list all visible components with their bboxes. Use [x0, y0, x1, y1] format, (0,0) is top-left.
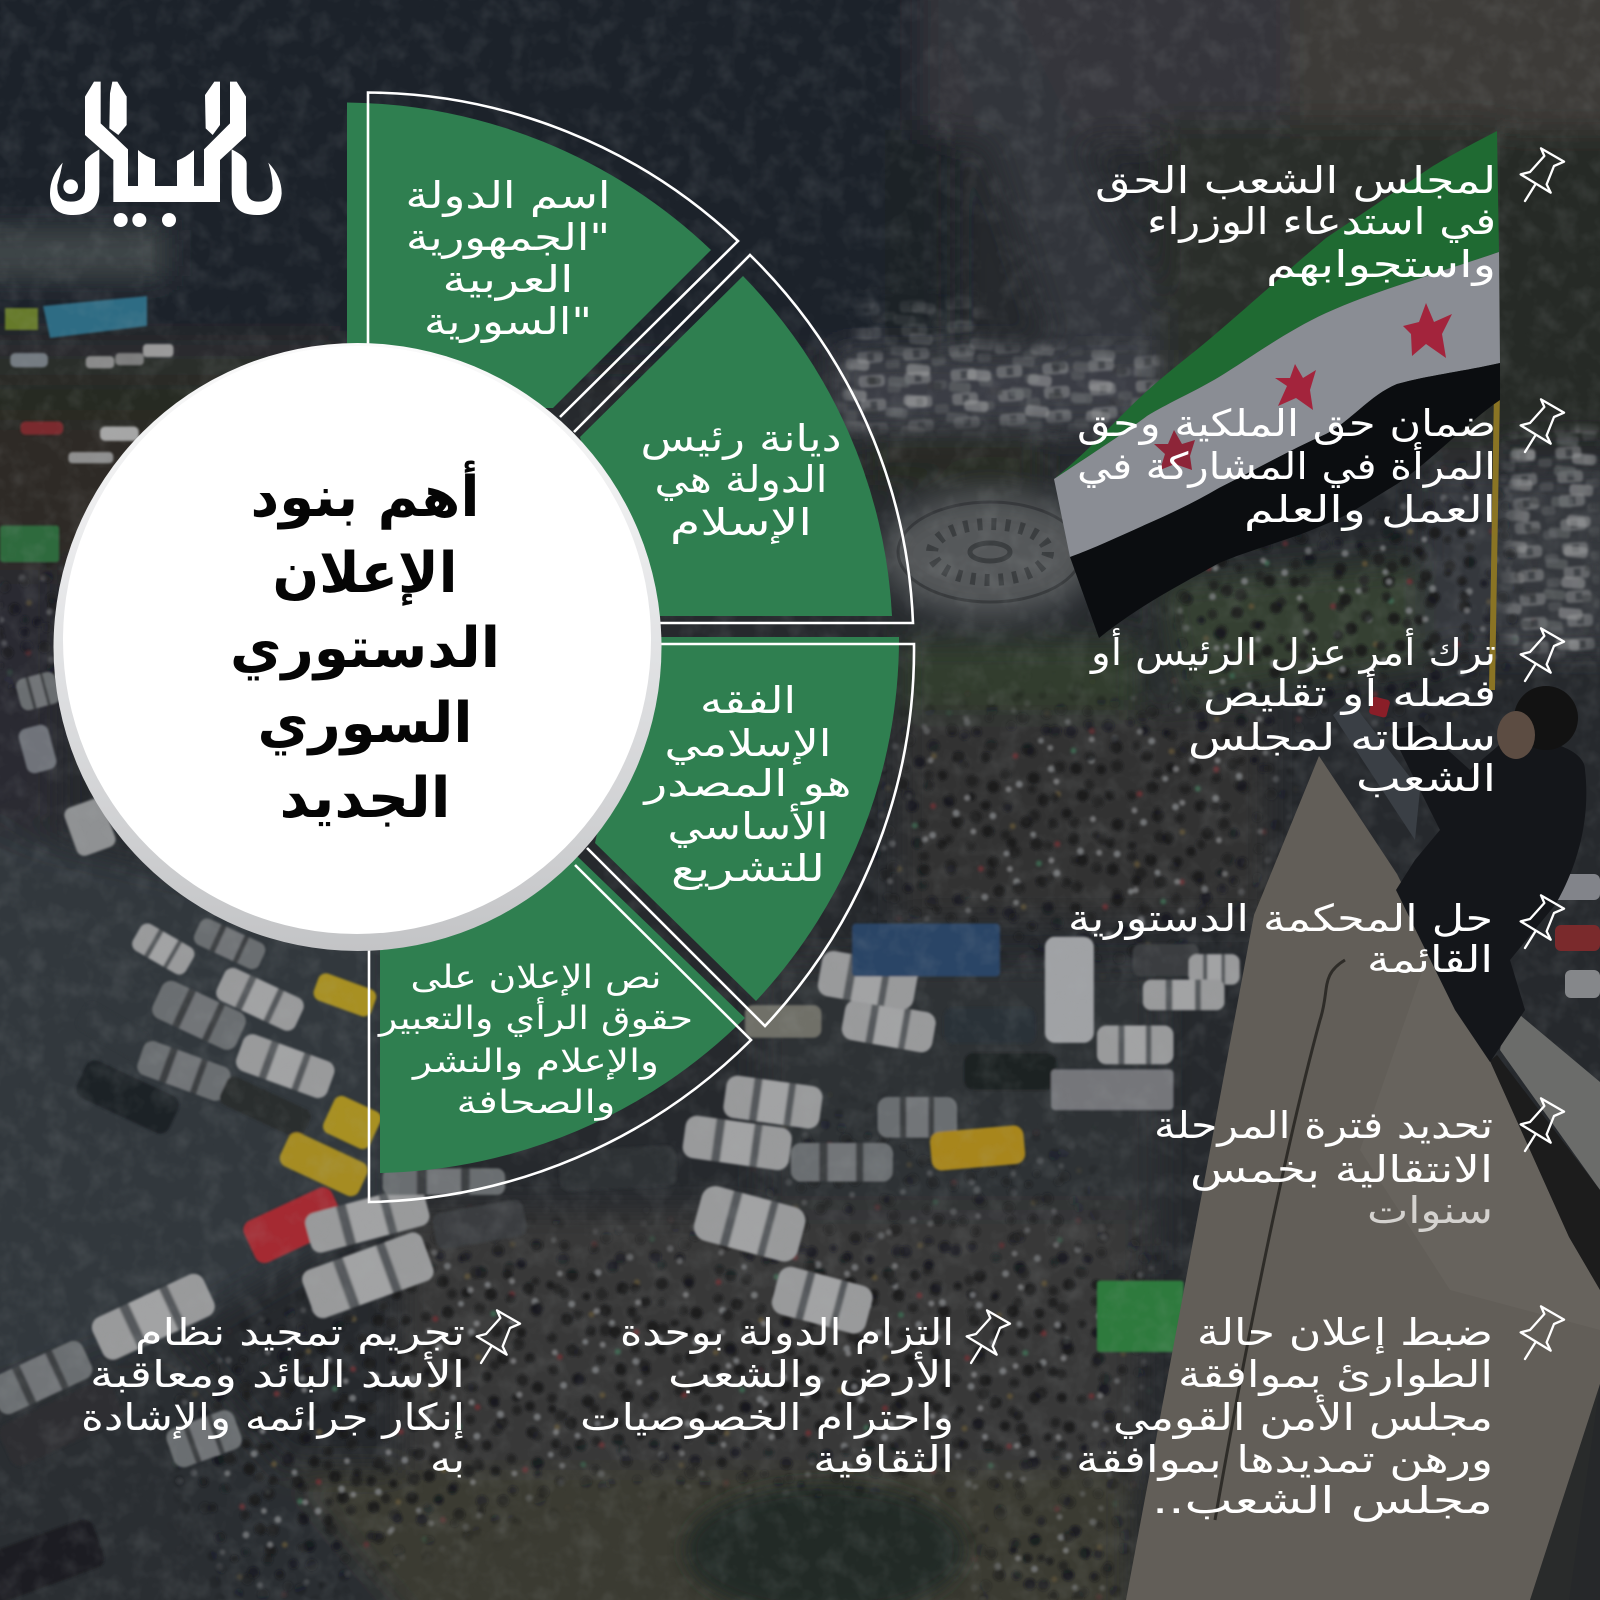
item 1: summoning ministers: واستجوابهم — [1266, 243, 1496, 286]
title: الدستوري — [230, 616, 500, 681]
item 6: state of emergency: ورهن تمديدها بموافقة — [1076, 1438, 1493, 1481]
title — [230, 460, 500, 831]
item 7: unity of the land: التزام الدولة بوحدة — [620, 1311, 954, 1354]
item 6: state of emergency: ضبط إعلان حالة — [1197, 1311, 1493, 1354]
item 5: transition period: سنوات — [1367, 1189, 1493, 1232]
item 3: removing the president: فصله أو تقليص — [1203, 669, 1496, 715]
item 7: unity of the land: واحترام الخصوصيات — [580, 1396, 954, 1439]
segment 2: religion of head of state: ديانة رئيس — [640, 417, 842, 460]
item 4: constitutional court: القائمة — [1367, 938, 1493, 981]
item 2: property and women's rights: العمل والعلم — [1244, 488, 1496, 531]
icon: pin 8 — [477, 1310, 520, 1363]
item 7: unity of the land — [580, 1311, 954, 1481]
item 6: state of emergency: مجلس الشعب.. — [1152, 1479, 1493, 1522]
concrete tower and man — [1126, 686, 1600, 1600]
item 5: transition period — [1154, 1104, 1493, 1232]
segment 2: religion of head of state: الإسلام — [670, 501, 812, 544]
item 8: glorifying the Assad regime: إنكار جرائمه والإشادة — [81, 1396, 465, 1439]
billboard — [43, 296, 147, 338]
item 3: removing the president: ترك أمر عزل الرئيس أو — [1089, 628, 1496, 674]
icon: pin 5 — [1521, 1098, 1564, 1151]
item 8: glorifying the Assad regime: به — [430, 1438, 465, 1481]
item 3: removing the president: الشعب — [1356, 757, 1496, 800]
segment 4: freedom of opinion — [369, 856, 751, 1202]
item 8: glorifying the Assad regime: الأسد البائد ومعاقبة — [90, 1351, 465, 1396]
title: الإعلان — [272, 541, 458, 606]
plaza rings — [898, 502, 1082, 602]
segment 2: religion of head of state: الدولة هي — [654, 458, 828, 501]
segment 4: freedom of opinion: نص الإعلان على — [410, 958, 662, 996]
segment 1: state name: العربية — [442, 258, 574, 301]
segment 3: Islamic jurisprudence: للتشريع — [671, 847, 825, 890]
segment 3: Islamic jurisprudence: هو المصدر — [642, 762, 852, 805]
item 1: summoning ministers: لمجلس الشعب الحق — [1095, 159, 1496, 202]
title: الجديد — [280, 766, 450, 831]
parked cars — [0, 344, 1240, 1600]
item 4: constitutional court — [1068, 897, 1493, 981]
segment 4: freedom of opinion: والصحافة — [456, 1083, 616, 1121]
item 6: state of emergency — [1076, 1311, 1493, 1522]
icon: pin 1 — [1521, 148, 1564, 201]
item 8: glorifying the Assad regime — [81, 1311, 465, 1481]
item 5: transition period: الانتقالية بخمس — [1190, 1148, 1493, 1191]
icon: pin 3 — [1521, 628, 1564, 681]
item 4: constitutional court: حل المحكمة الدستورية — [1068, 897, 1493, 940]
item 2: property and women's rights — [1077, 402, 1496, 531]
segment 3: Islamic jurisprudence: الأساسي — [668, 803, 828, 848]
item 6: state of emergency: مجلس الأمن القومي — [1113, 1394, 1493, 1439]
segment 1: state name: اسم الدولة — [406, 174, 610, 217]
syrian flag — [1054, 131, 1500, 690]
item 5: transition period: تحديد فترة المرحلة — [1154, 1104, 1493, 1147]
item 3: removing the president: سلطاته لمجلس — [1188, 716, 1496, 759]
item 1: summoning ministers — [1095, 159, 1496, 286]
item 7: unity of the land: الثقافية — [813, 1438, 954, 1481]
item 2: property and women's rights: ضمان حق الملكية وحق — [1077, 402, 1496, 445]
small cars — [835, 296, 1600, 667]
crowd people — [0, 460, 1525, 1600]
item 2: property and women's rights: المرأة في المشاركة في — [1077, 442, 1496, 488]
item 8: glorifying the Assad regime: تجريم تمجيد نظام — [135, 1311, 465, 1354]
item 7: unity of the land: الأرض والشعب — [668, 1351, 954, 1396]
icon: pin 2 — [1521, 399, 1564, 452]
segment 3: Islamic jurisprudence — [587, 637, 914, 1026]
segment 1: state name: "الجمهورية — [406, 216, 610, 259]
segment 1: state name: "السورية — [424, 300, 592, 343]
item 3: removing the president — [1089, 628, 1496, 800]
item 1: summoning ministers: في استدعاء الوزراء — [1147, 200, 1496, 243]
segment 4: freedom of opinion: والإعلام والنشر — [411, 1042, 659, 1080]
segment 1: state name — [347, 92, 738, 417]
icon: pin 6 — [1521, 1306, 1564, 1359]
segment 3: Islamic jurisprudence: الفقه — [700, 679, 796, 722]
title: أهم بنود — [250, 460, 480, 530]
icon: pin 4 — [1521, 895, 1564, 948]
segment 3: Islamic jurisprudence: الإسلامي — [664, 722, 832, 765]
segment 4: freedom of opinion: حقوق الرأي والتعبير — [377, 997, 693, 1037]
central circle with title — [54, 343, 662, 951]
item 6: state of emergency: الطوارئ بموافقة — [1178, 1353, 1493, 1396]
segment 2: religion of head of state — [574, 255, 913, 623]
title: السوري — [258, 691, 472, 756]
icon: pin 7 — [967, 1310, 1010, 1363]
logo: Al Bayan — [50, 82, 282, 227]
